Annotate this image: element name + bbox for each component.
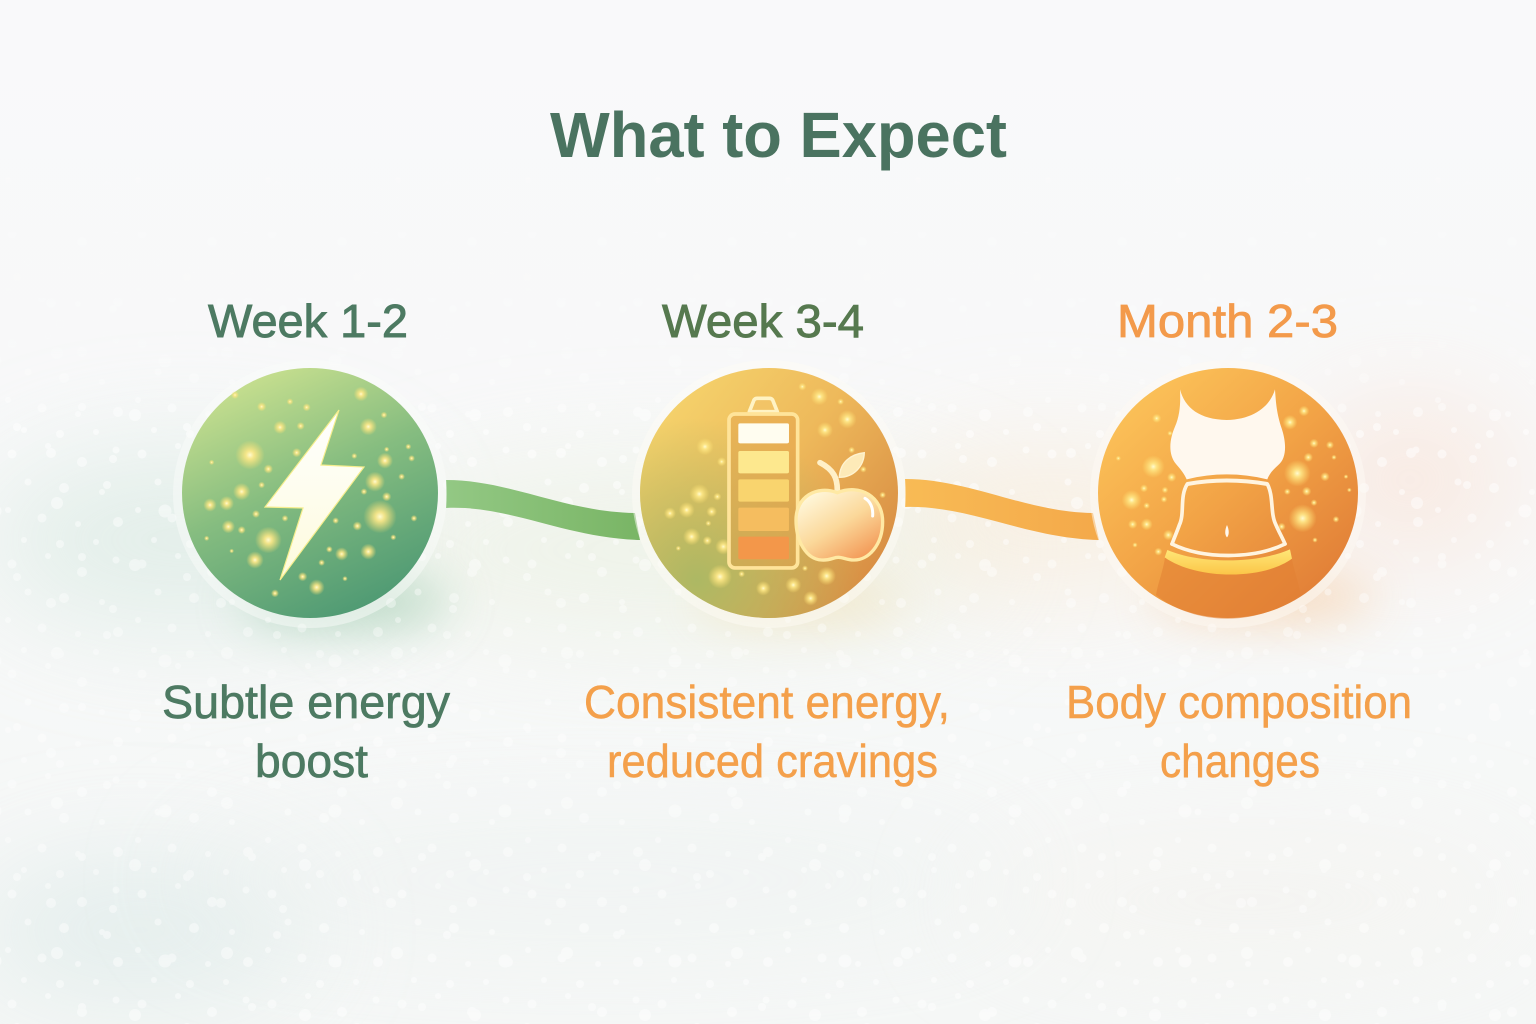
halo ring [173,360,447,628]
icon: lightning bolt [265,410,364,580]
halo ring [632,360,906,628]
circle badge green [182,368,438,618]
connector: week 3-4 to month 2-3 [905,479,1099,540]
heading: month 2-3: Month 2-3 [1117,295,1338,347]
torso outline [1172,484,1187,544]
label: week 1-2 outcome: Subtle energy [162,676,450,728]
waistband [1172,544,1285,555]
label: week 1-2 outcome [162,676,450,787]
sparkles orange [1116,406,1352,556]
icon: torso [1156,389,1301,619]
sparkles green [203,387,417,597]
label: week 3-4 outcome: Consistent energy, [584,676,950,728]
stage: month 2-3 [1066,295,1412,787]
connector: week 1-2 to week 3-4 [446,480,640,540]
heading: week 1-2: Week 1-2 [208,295,408,347]
label: month 2-3 outcome [1066,676,1412,787]
title: What to Expect [550,99,1007,171]
stage: week 1-2 [162,295,450,787]
icon: battery [729,398,798,568]
label: month 2-3 outcome: changes [1160,735,1320,787]
waist line [1187,480,1267,484]
navel [1225,525,1229,537]
label: week 1-2 outcome: boost [255,735,368,787]
label: week 3-4 outcome: reduced cravings [607,735,938,787]
halo ring [1090,360,1366,628]
icon: apple [796,453,883,560]
pants shading [1156,557,1301,619]
background haze [0,383,1524,1024]
label: week 3-4 outcome [584,676,950,787]
tank top [1170,389,1285,479]
stage: week 3-4 [584,295,950,787]
circle badge orange [1098,368,1358,618]
sparkles yellow [664,383,886,606]
circle badge yellow [640,368,898,618]
heading: week 3-4: Week 3-4 [662,295,864,347]
label: month 2-3 outcome: Body composition [1066,676,1412,728]
